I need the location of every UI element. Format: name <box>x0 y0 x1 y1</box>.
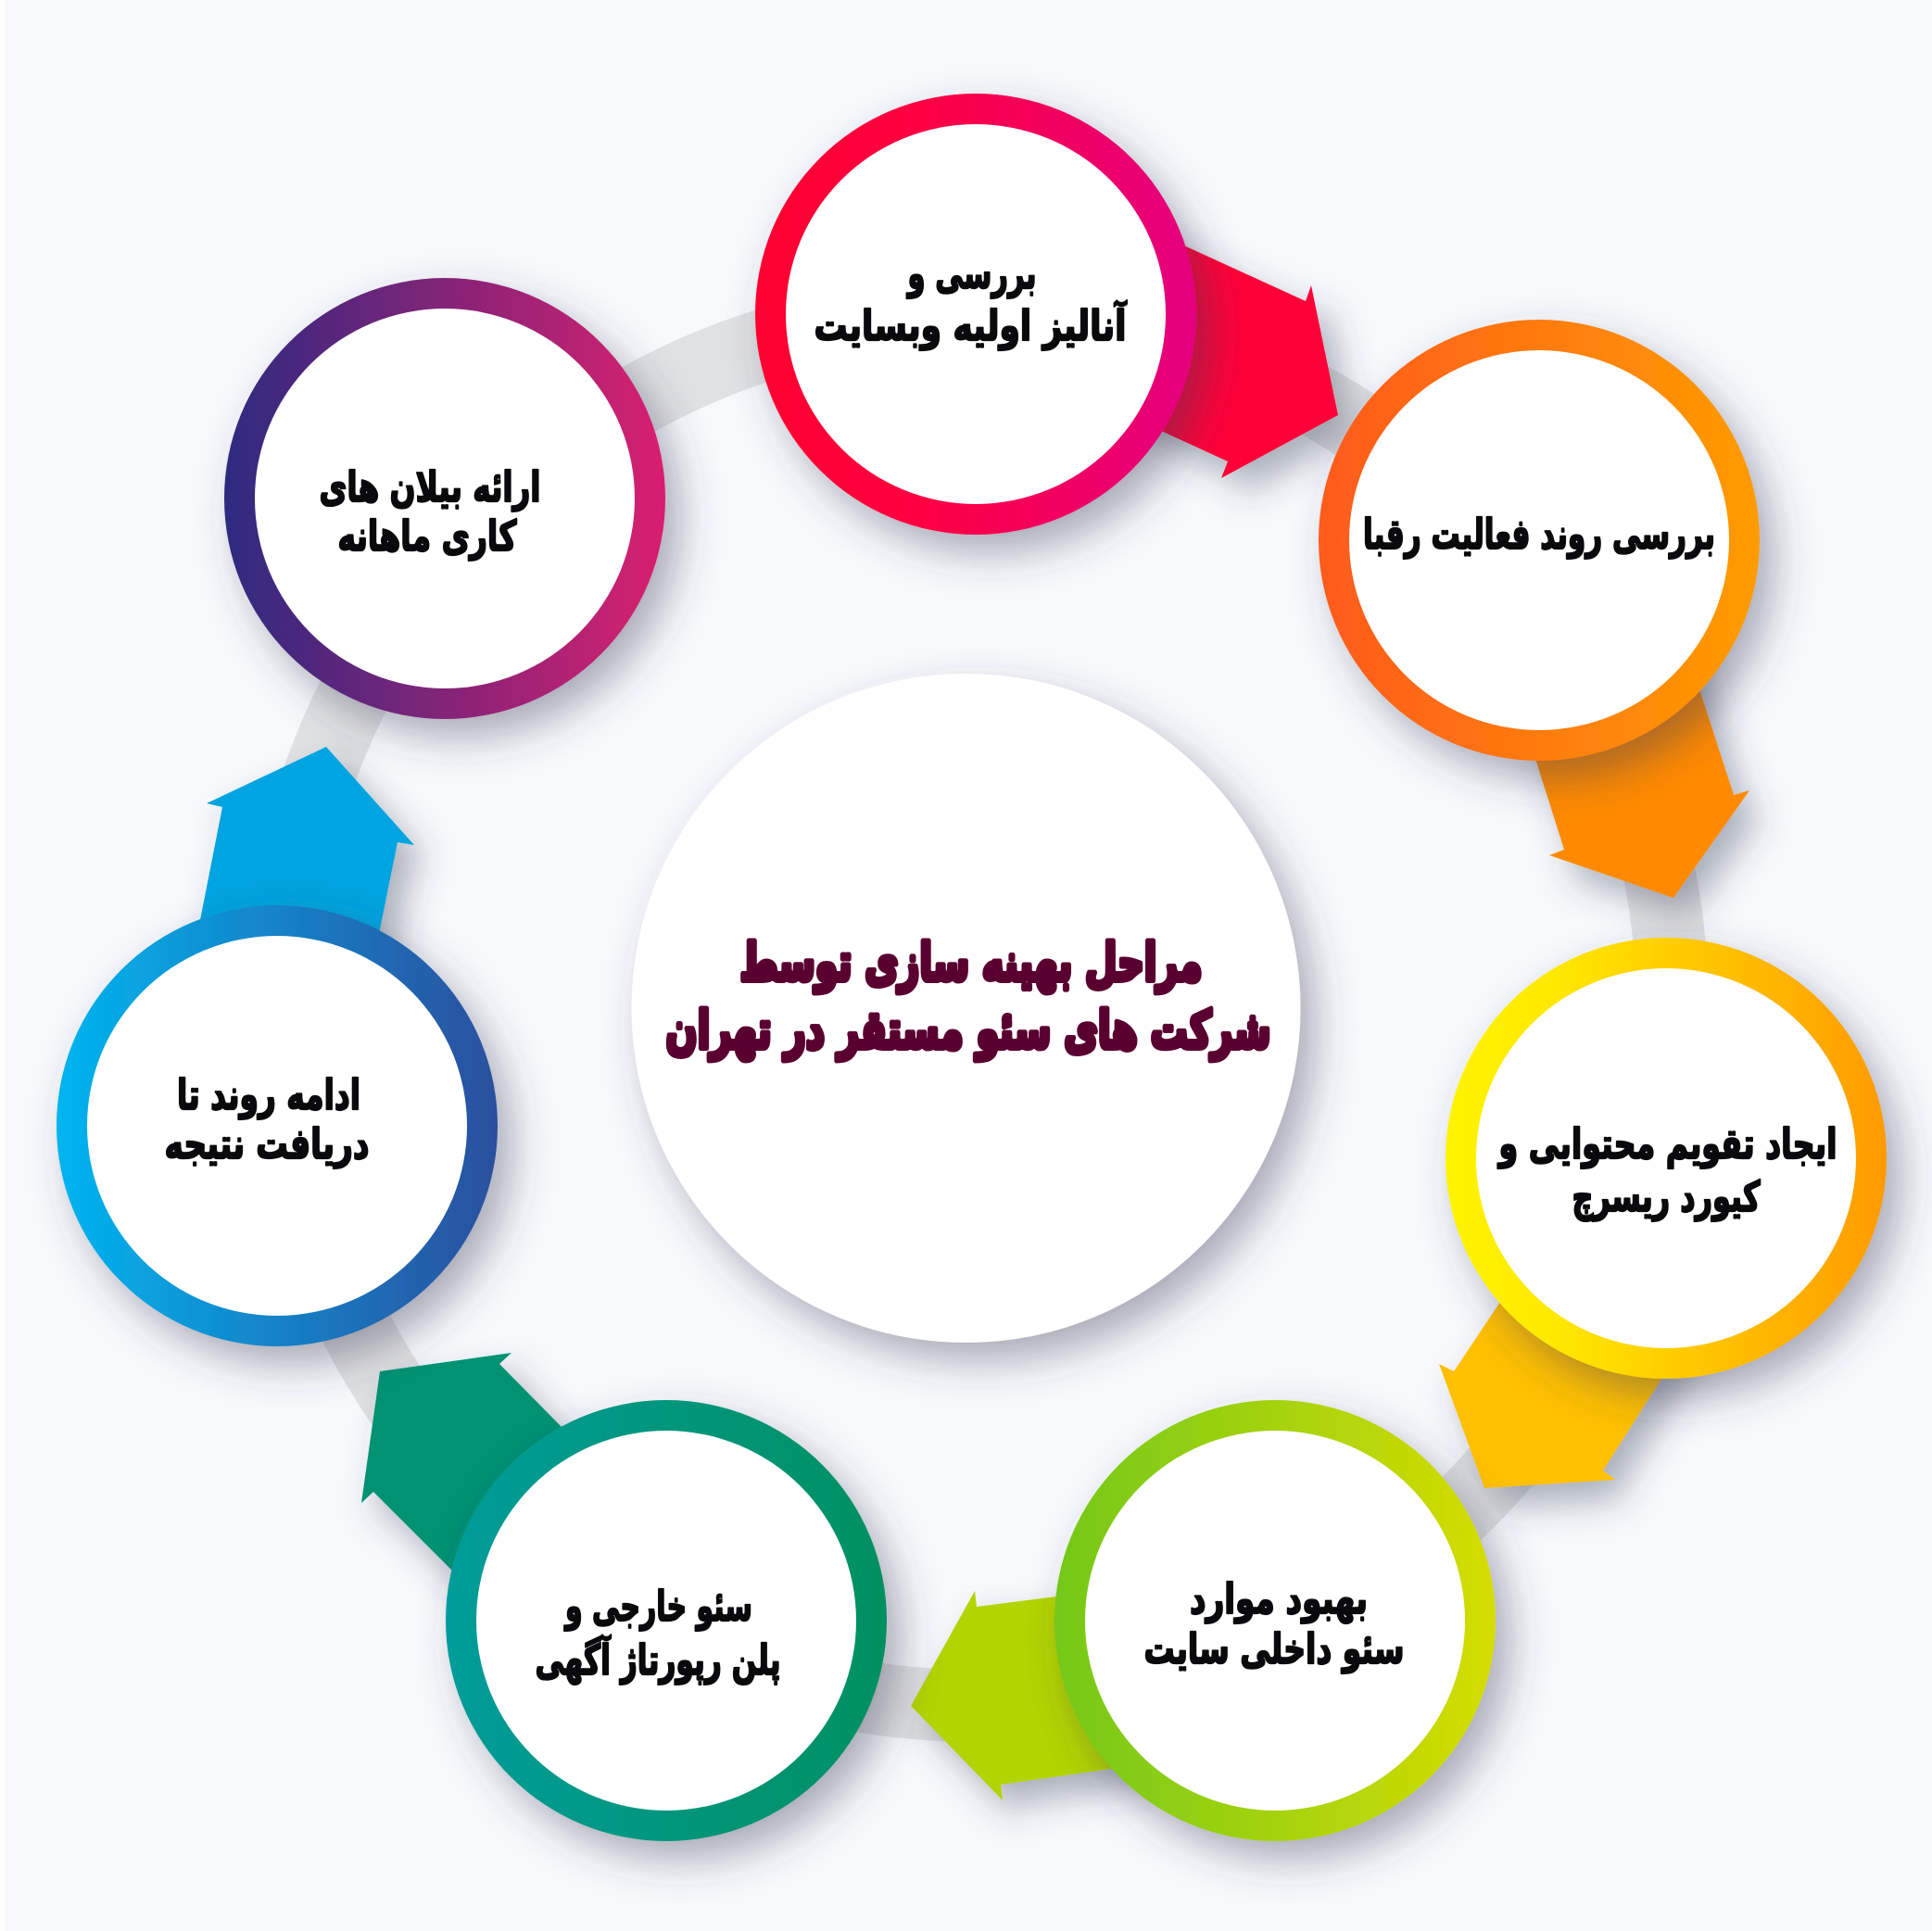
arrow: green, step 4 to step 5 <box>911 1586 1221 1800</box>
panel: step 1, red circle <box>755 94 1196 535</box>
panel: step 6, blue circle: ادامه روند تا <box>177 1070 360 1119</box>
panel: step 5, teal circle <box>446 1400 887 1841</box>
panel: step 5, teal circle: سئو خارجی و <box>564 1582 752 1631</box>
panel: step 7, purple circle: ارائه بیلان های <box>319 462 541 511</box>
panel: step 2, orange circle <box>1319 320 1760 761</box>
arrow: blue, step 6 to step 7 <box>178 747 414 1033</box>
panel: step 3, yellow circle <box>1446 938 1887 1379</box>
arrow: yellow, step 3 to step 4 <box>1439 1238 1720 1488</box>
panel: step 1, red circle: بررسی و <box>906 249 1036 298</box>
panel: step 4, green circle: بهبود موارد <box>1190 1574 1368 1623</box>
title: شرکت های سئو مستقر در تهران <box>665 1001 1271 1061</box>
arrow: red, step 1 to step 2 <box>1067 192 1338 478</box>
panel: step 6, blue circle <box>57 905 498 1346</box>
panel: step 4, green circle: سئو داخلی سایت <box>1143 1624 1405 1673</box>
arrow: orange, step 2 to step 3 <box>1509 589 1749 898</box>
panel: step 7, purple circle <box>224 278 665 719</box>
circular gray track <box>279 312 1673 1706</box>
panel: step 5, teal circle: پلن رپورتاژ آگهی <box>536 1634 780 1685</box>
title <box>665 933 1271 1061</box>
center circle with title <box>632 674 1301 1343</box>
arrow: teal, step 5 to step 6 <box>361 1353 620 1644</box>
panel: step 7, purple circle: کاری ماهانه <box>337 511 517 561</box>
title: مراحل بهینه سازی توسط <box>739 933 1203 993</box>
panel: step 4, green circle <box>1054 1400 1496 1841</box>
panel: step 2, orange circle: بررسی روند فعالیت رقبا <box>1363 510 1715 559</box>
panel: step 6, blue circle: دریافت نتیجه <box>165 1119 369 1168</box>
panel: step 3, yellow circle: کیورد ریسرچ <box>1572 1172 1761 1221</box>
panel: step 1, red circle: آنالیز اولیه وبسایت <box>814 300 1128 350</box>
